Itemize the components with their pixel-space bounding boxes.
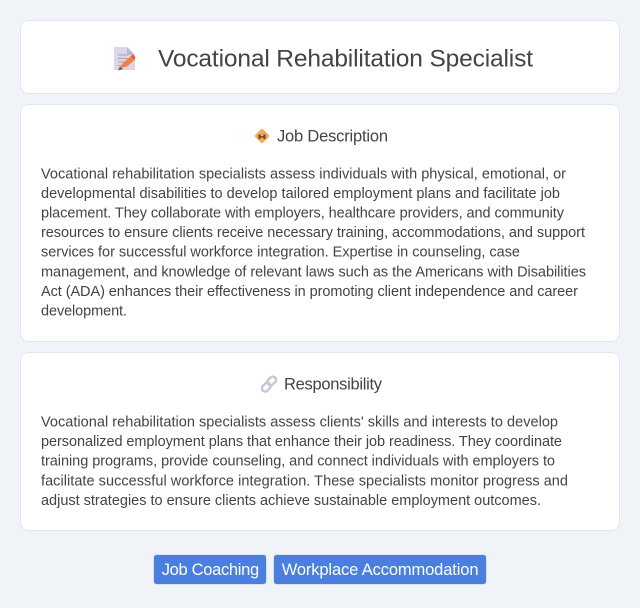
icon: document with pencil <box>114 47 136 70</box>
panel: title <box>20 20 620 94</box>
text block: job description: developmental disabilities to develop tailored employment plans and facilitate job <box>41 186 560 202</box>
tag: job coaching: Job Coaching <box>162 561 259 579</box>
tag: workplace accommodation <box>274 554 486 584</box>
tag: job coaching <box>154 554 266 584</box>
panel: responsibility <box>20 352 620 530</box>
panel: job description <box>20 104 620 342</box>
title text: Vocational Rehabilitation Specialist <box>158 46 533 72</box>
text block: responsibility: personalized employment plans that enhance their job readiness. They coordinate <box>41 434 562 450</box>
icon: orange diamond <box>254 128 270 144</box>
heading: job description: Job Description <box>277 128 388 146</box>
icon: link <box>261 375 277 393</box>
text block: responsibility: training programs, provide counseling, and connect individuals with employers to <box>41 454 555 470</box>
text block: responsibility <box>41 415 568 509</box>
text block: responsibility: adjust strategies to ensure clients achieve sustainable employment outcomes. <box>41 493 541 509</box>
text block: job description: services for successful workforce integration. Expertise in counseling, case <box>41 245 520 261</box>
text block: responsibility: facilitate successful workforce integration. These specialists monitor progress and <box>41 473 568 489</box>
text block: responsibility: Vocational rehabilitation specialists assess clients' skills and interests to develop <box>41 415 558 431</box>
text block: job description: Act (ADA) enhances their effectiveness in promoting client independence and career <box>41 284 578 300</box>
text block: job description: resources to ensure clients receive necessary training, accommodations, and support <box>41 225 585 241</box>
tag: workplace accommodation: Workplace Accommodation <box>282 561 478 579</box>
text block: job description <box>41 166 586 320</box>
text block: job description: management, and knowledge of relevant laws such as the Americans with Disabilities <box>41 264 586 280</box>
text block: job description: development. <box>41 304 127 320</box>
text block: job description: Vocational rehabilitation specialists assess individuals with physical, emotional, or <box>41 166 566 182</box>
heading: responsibility: Responsibility <box>284 376 383 394</box>
text block: job description: placement. They collaborate with employers, healthcare providers, and community <box>41 206 565 222</box>
